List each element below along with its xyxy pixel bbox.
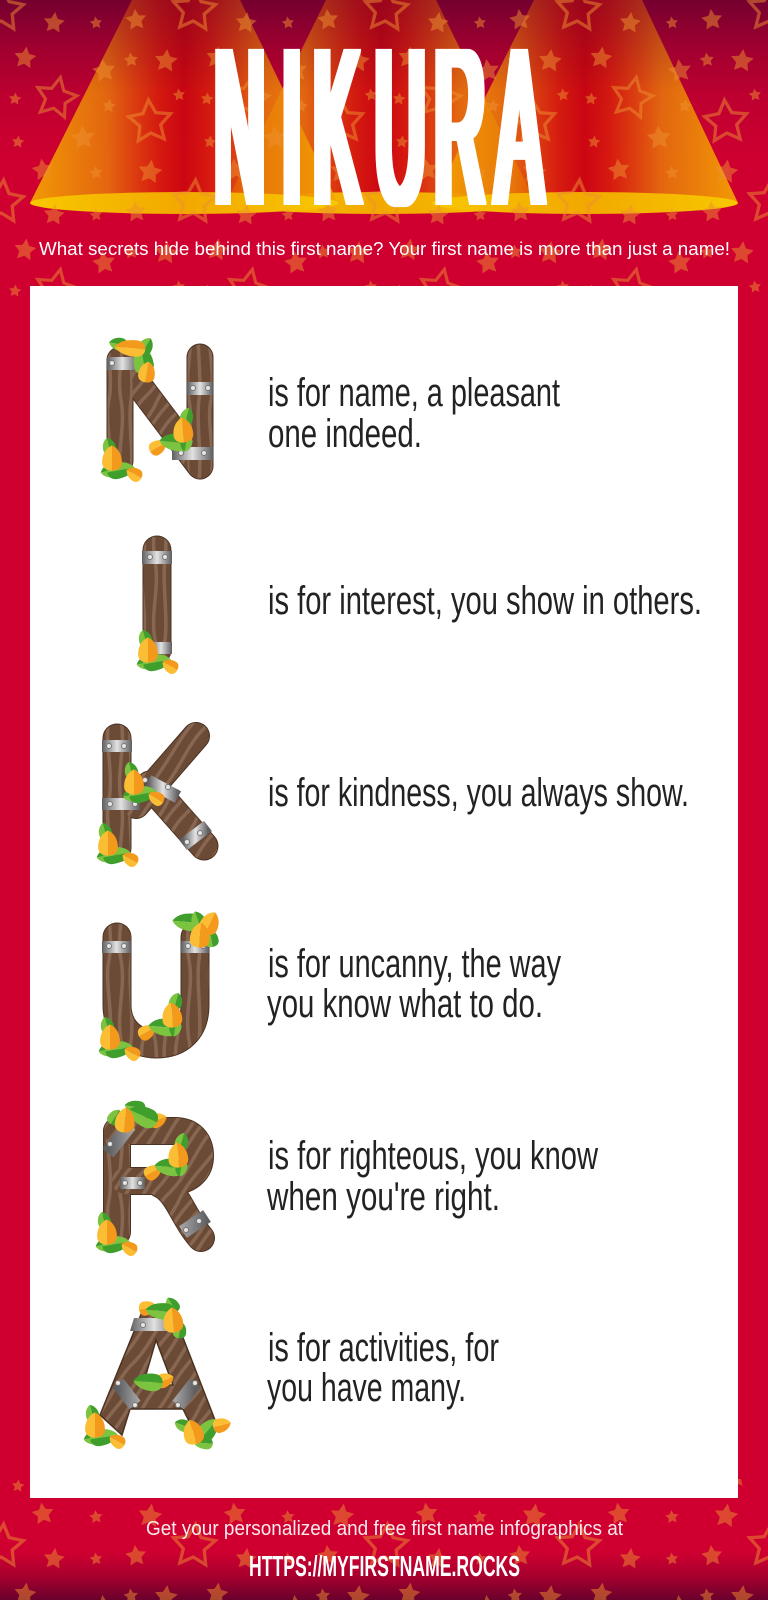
text: A	[267, 1326, 499, 1410]
icon: wooden letter U	[98, 908, 224, 1063]
text: U: is for uncanny, the way	[268, 942, 561, 986]
icon: wooden letter K	[96, 736, 208, 869]
white content panel	[30, 286, 738, 1498]
spotlight: right	[432, 0, 738, 214]
icon: wooden letter N	[100, 335, 213, 484]
star pattern: top	[0, 0, 768, 300]
text: N	[268, 371, 560, 456]
text: U	[267, 942, 561, 1026]
text: U: you know what to do.	[267, 982, 543, 1026]
text: A: is for activities, for	[268, 1326, 499, 1370]
text: N: one indeed.	[268, 412, 422, 456]
footer call to action: Get your personalized and free first name infographics at	[146, 1518, 623, 1540]
text: A: you have many.	[267, 1366, 466, 1410]
subtitle: What secrets hide behind this first name? Your first name is more than just a name!	[39, 239, 730, 259]
spotlight: left	[30, 0, 338, 214]
icon: wooden letter A	[83, 1294, 233, 1451]
text: R	[266, 1134, 598, 1219]
text: R: is for righteous, you know	[268, 1134, 598, 1178]
spotlight: centre	[226, 0, 536, 214]
footer URL: HTTPS://MYFIRSTNAME.ROCKS	[249, 1551, 520, 1583]
text: R: when you're right.	[266, 1175, 500, 1219]
title: NIKURA	[215, 3, 542, 253]
icon: wooden letter I	[136, 550, 181, 676]
text: N: is for name, a pleasant	[268, 371, 560, 415]
star pattern: bottom	[0, 1479, 768, 1600]
icon: wooden letter R	[95, 1099, 207, 1258]
